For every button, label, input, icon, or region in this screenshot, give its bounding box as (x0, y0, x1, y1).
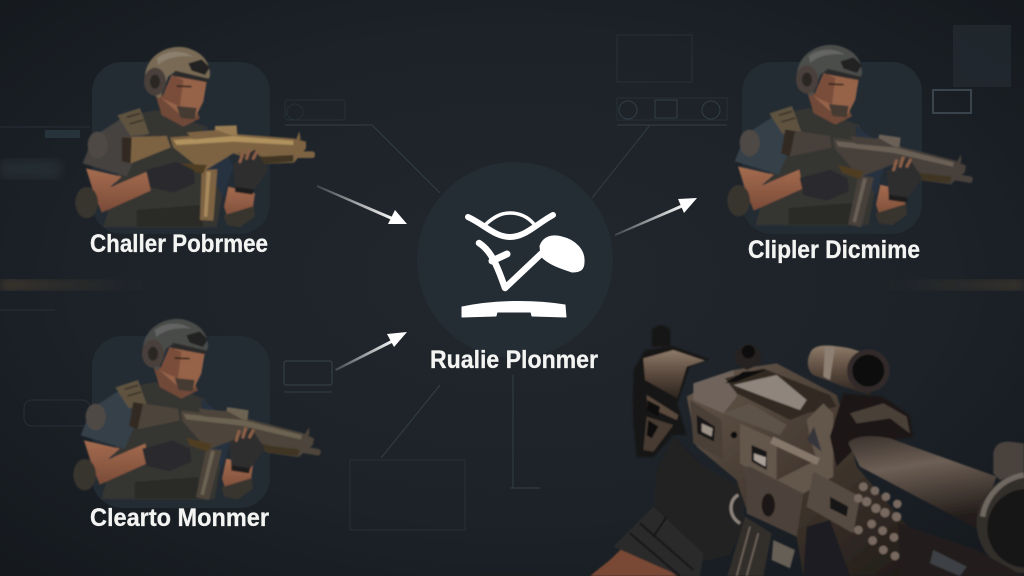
label: bottom left soldier: Clearto Monmer (90, 504, 269, 532)
panel: soldier bottom left backdrop (92, 336, 270, 508)
soldier: right (727, 45, 978, 245)
arrow: top left to centre (317, 185, 407, 224)
knob right (993, 442, 1024, 480)
receiver (687, 363, 950, 576)
forearm (590, 544, 677, 576)
foreground rifle with gloved hand (590, 325, 1024, 576)
arrow: bottom left to centre (335, 332, 407, 371)
panel: soldier right backdrop (742, 62, 922, 234)
label: central: Rualie Plonmer (430, 346, 598, 374)
panel: soldier top left backdrop (92, 62, 270, 234)
label: right soldier: Clipler Dicmime (748, 236, 920, 264)
muzzle (977, 473, 1024, 573)
central icon (462, 213, 584, 317)
glove (613, 437, 745, 576)
scope mount (830, 393, 913, 467)
rail ribs (854, 482, 902, 560)
lower barrel shade (898, 523, 1024, 576)
barrel (848, 436, 997, 528)
arrow: centre to right (615, 198, 697, 236)
right hand shadow (803, 520, 850, 576)
soldier: top left (75, 47, 315, 227)
soldier: bottom left (73, 319, 326, 518)
knob left (652, 325, 671, 347)
scope (808, 346, 877, 395)
left top knob (735, 344, 762, 370)
label: top left soldier: Challer Pobrmee (90, 230, 268, 258)
decorative haze (0, 160, 1024, 290)
stock (633, 346, 710, 457)
lower grip (727, 517, 772, 576)
panel: central circle (417, 162, 613, 358)
